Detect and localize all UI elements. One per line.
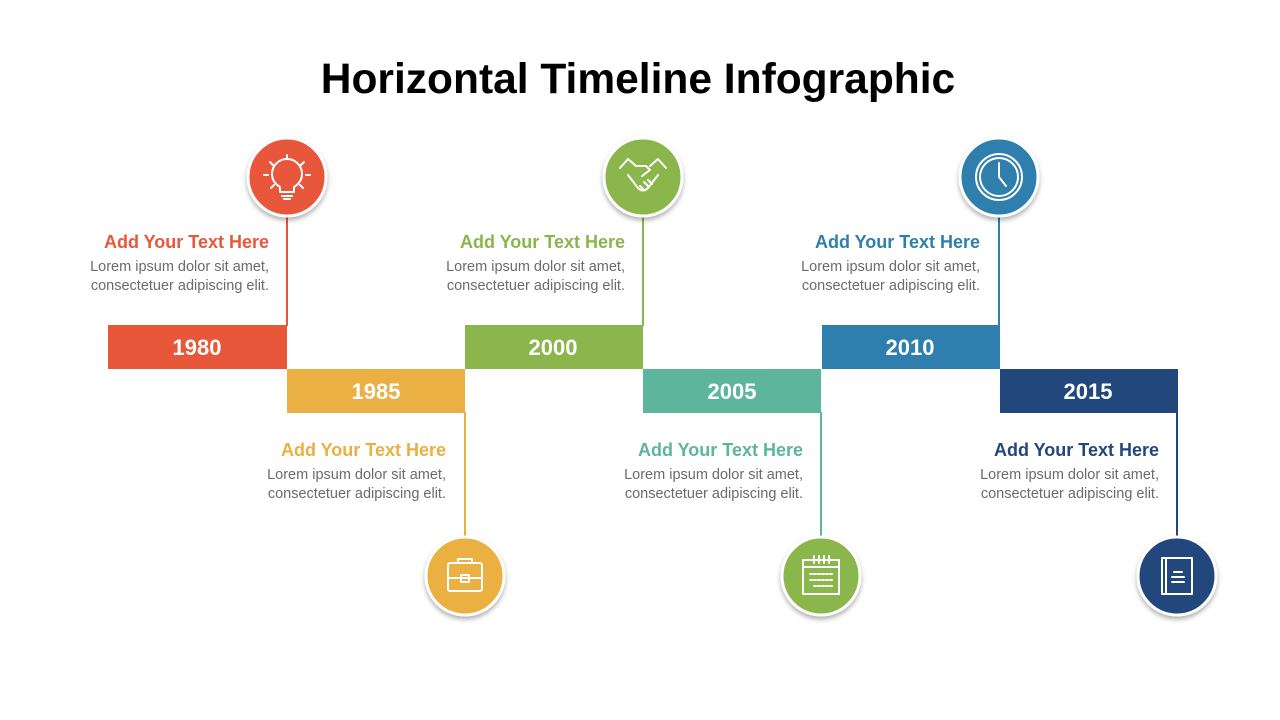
text block 2005: consectetuer adipiscing elit.: [625, 486, 803, 502]
icon: calendar: [782, 537, 860, 615]
text block 2015: Lorem ipsum dolor sit amet,: [980, 467, 1159, 483]
text block 2010: Add Your Text Here: [815, 232, 980, 252]
text block 1985: [267, 440, 446, 502]
year bar 2005: 2005: [708, 379, 756, 404]
year bar 2000: [465, 325, 643, 369]
icon: briefcase: [426, 537, 504, 615]
text block 2005: [624, 440, 803, 502]
icon: lightbulb: [248, 138, 326, 216]
year bar 1985: [287, 369, 465, 413]
text block 1980: Lorem ipsum dolor sit amet,: [90, 259, 269, 275]
year bar 2010: 2010: [886, 335, 934, 360]
text block 2010: consectetuer adipiscing elit.: [802, 278, 980, 294]
text block 2000: [446, 232, 625, 294]
icon: handshake: [604, 138, 682, 216]
text block 2000: Add Your Text Here: [460, 232, 625, 252]
text block 1985: consectetuer adipiscing elit.: [268, 486, 446, 502]
text block 2000: Lorem ipsum dolor sit amet,: [446, 259, 625, 275]
year bar 2000: 2000: [529, 335, 577, 360]
year bar 1985: 1985: [352, 379, 400, 404]
year bar 2015: [1000, 369, 1178, 413]
icon: clock: [960, 138, 1038, 216]
connector lines: [287, 214, 1177, 540]
text block 1985: Add Your Text Here: [281, 440, 446, 460]
text block 2005: Add Your Text Here: [638, 440, 803, 460]
year bar 2015: 2015: [1064, 379, 1112, 404]
text block 2015: consectetuer adipiscing elit.: [981, 486, 1159, 502]
title: Horizontal Timeline Infographic: [321, 56, 955, 103]
year bar 2005: [643, 369, 821, 413]
text block 2010: Lorem ipsum dolor sit amet,: [801, 259, 980, 275]
text block 2005: Lorem ipsum dolor sit amet,: [624, 467, 803, 483]
text block 2015: [980, 440, 1159, 502]
text block 1985: Lorem ipsum dolor sit amet,: [267, 467, 446, 483]
year bar 2010: [822, 325, 1000, 369]
text block 1980: [90, 232, 269, 294]
text block 1980: consectetuer adipiscing elit.: [91, 278, 269, 294]
year bar 1980: [108, 325, 287, 369]
text block 2000: consectetuer adipiscing elit.: [447, 278, 625, 294]
year bar 1980: 1980: [173, 335, 221, 360]
icon: notebook: [1138, 537, 1216, 615]
text block 2015: Add Your Text Here: [994, 440, 1159, 460]
text block 2010: [801, 232, 980, 294]
text block 1980: Add Your Text Here: [104, 232, 269, 252]
